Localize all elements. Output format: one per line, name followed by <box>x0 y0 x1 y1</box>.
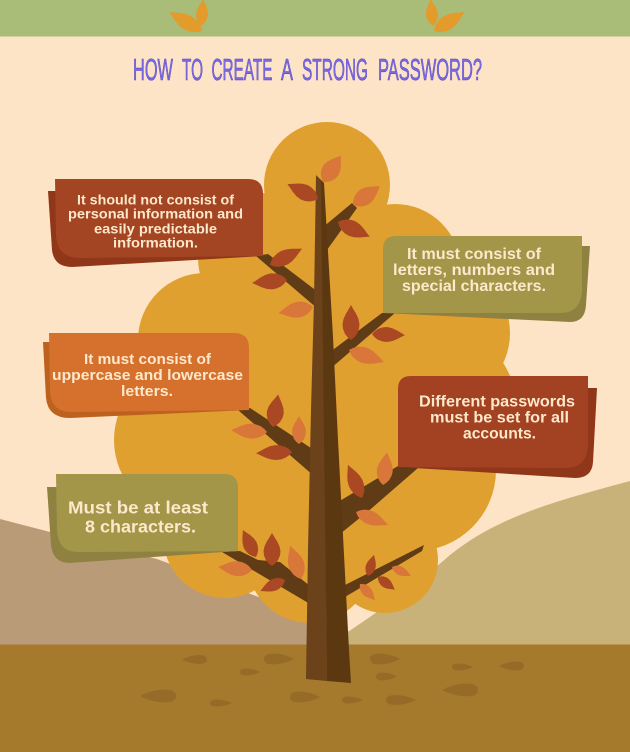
callout text: uppercase and lowercase <box>52 367 243 384</box>
title: STRONG <box>302 52 368 87</box>
tree canopy <box>114 122 517 623</box>
callout text: letters. <box>121 383 173 400</box>
tree branches <box>222 203 424 604</box>
callout text: It must consist of <box>84 351 212 368</box>
callout text: It should not consist of <box>77 192 235 208</box>
callout text: accounts. <box>463 426 536 442</box>
callout text: It must consist of <box>407 246 542 263</box>
callout text <box>68 192 243 250</box>
title: A <box>281 52 293 87</box>
left hill <box>0 519 340 650</box>
callout text <box>393 246 555 295</box>
callout: at least 8 characters <box>47 474 238 563</box>
icon: right leaves <box>425 0 469 37</box>
right hill <box>320 481 630 650</box>
callout text <box>68 498 208 536</box>
callout text: personal information and <box>68 206 243 222</box>
callout text: special characters. <box>402 278 546 295</box>
tree trunk <box>306 175 351 683</box>
tree leaves <box>237 177 405 596</box>
title: PASSWORD? <box>378 52 482 87</box>
callout: uppercase and lowercase <box>43 333 249 418</box>
callout text <box>52 351 243 400</box>
title <box>133 52 482 87</box>
callout: letters, numbers, special characters <box>383 236 590 322</box>
title: CREATE <box>212 52 272 87</box>
title: TO <box>182 52 203 87</box>
callout: different passwords <box>398 376 597 478</box>
top green banner <box>0 0 630 37</box>
ground <box>0 644 630 752</box>
fallen leaves on ground <box>140 654 524 706</box>
title: HOW <box>133 52 173 87</box>
callout text <box>419 394 575 442</box>
callout text: 8 characters. <box>85 516 196 536</box>
callout: personal information <box>48 179 263 267</box>
callout text: Different passwords <box>419 394 575 410</box>
tree leaves orange <box>217 150 413 603</box>
callout text: Must be at least <box>68 498 208 518</box>
callout text: letters, numbers and <box>393 262 555 279</box>
icon: left leaves <box>165 0 209 37</box>
callout text: must be set for all <box>430 410 569 426</box>
callout text: easily predictable <box>94 222 218 236</box>
callout text: information. <box>113 236 198 250</box>
